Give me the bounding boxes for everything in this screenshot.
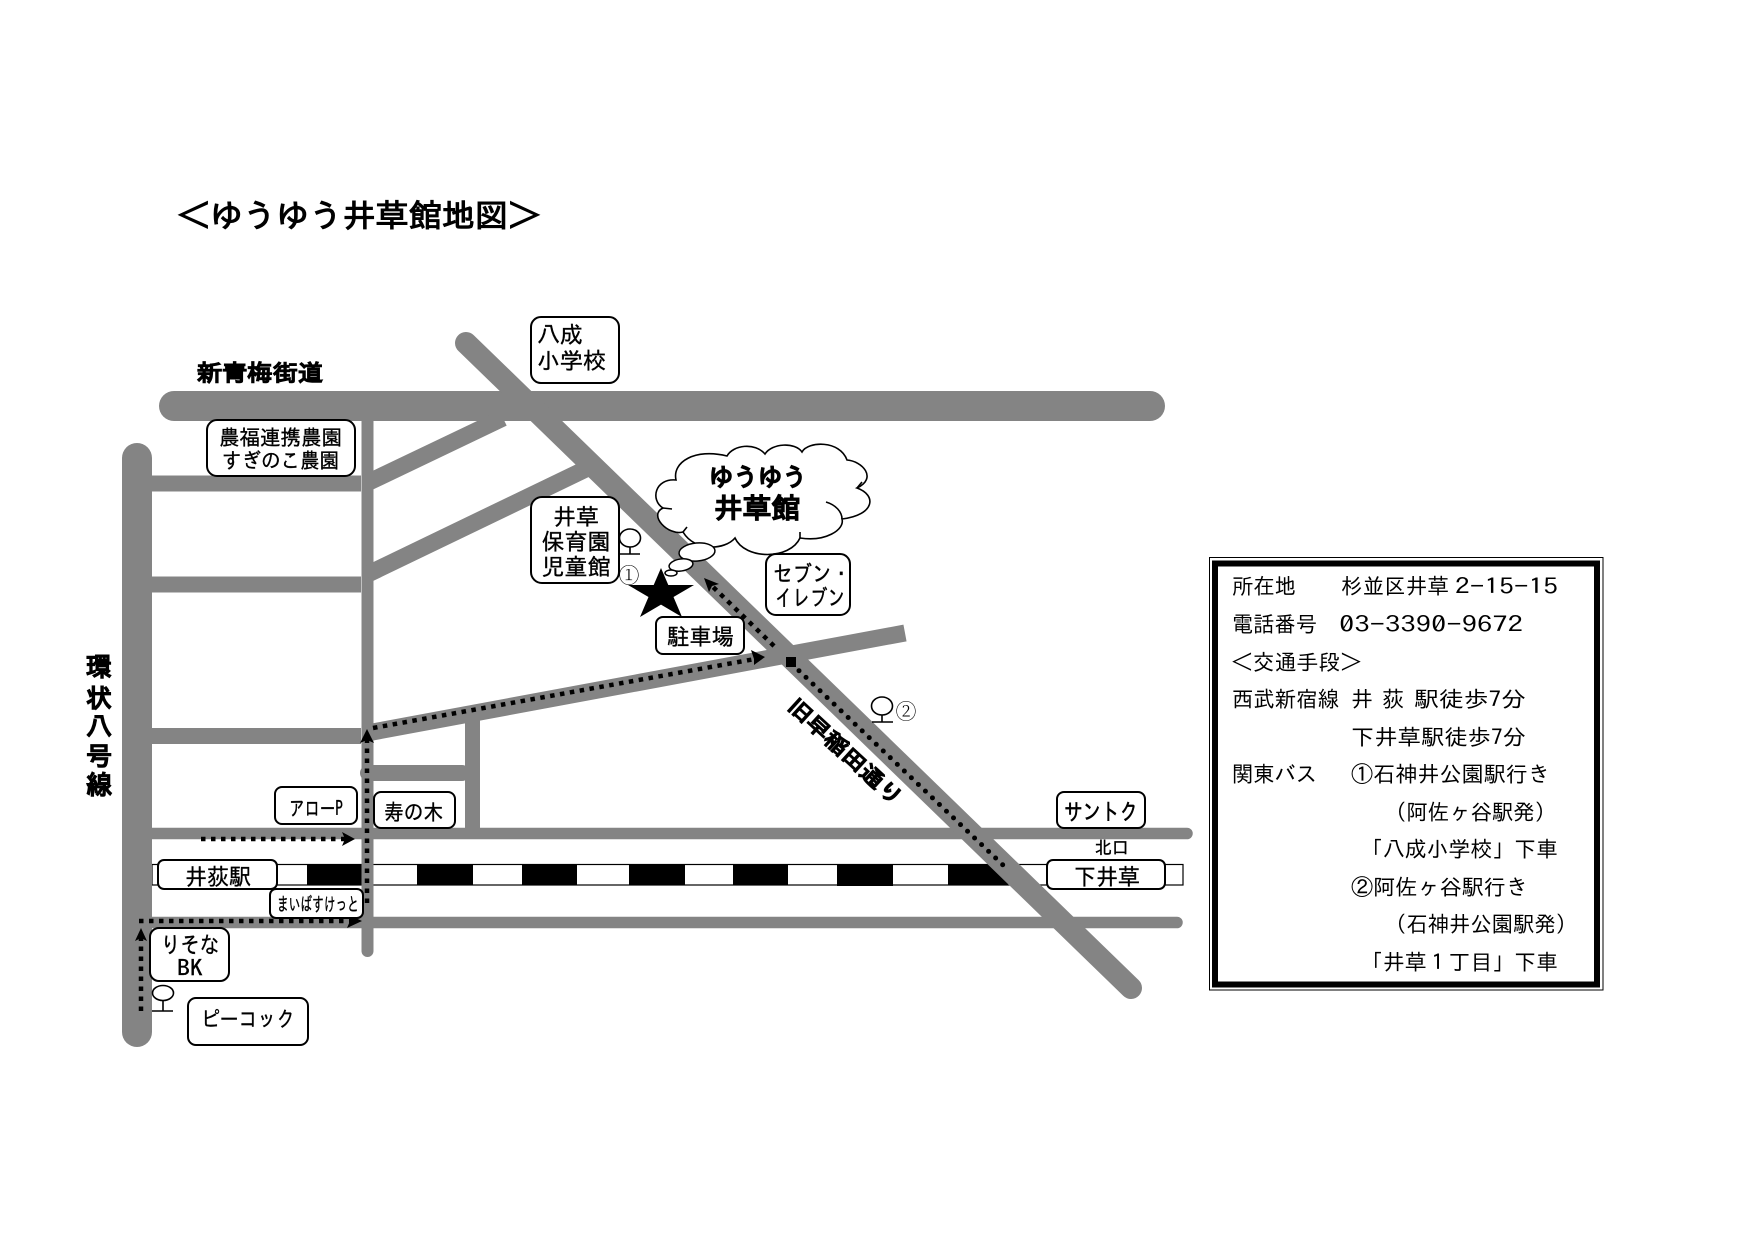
road label: 環状八号線: 八 (86, 714, 112, 740)
label: ピーコック (188, 998, 308, 1045)
road: street toward intersection (367, 633, 905, 733)
label: 寿の木 (374, 792, 455, 828)
road: street south of railway (150, 917, 1177, 928)
Kanto Bus access: （阿佐ヶ谷駅発） (1385, 801, 1556, 823)
icon: bus stop 3 (152, 986, 174, 1011)
address: 2-15-15 (1455, 575, 1558, 597)
label: 農福連携農園 すぎのこ農園: 農福連携農園 (219, 426, 342, 448)
Seibu Shinjuku line access: 駅徒歩7分 (1414, 688, 1526, 710)
label: まいばすけっと (270, 889, 363, 918)
label: アローP: アローP (289, 798, 343, 819)
callout: thought cloud ゆうゆう井草館 (656, 444, 870, 576)
road: west side street 1 (150, 476, 361, 492)
icon: bus stop 2 (872, 697, 893, 722)
icon: bus stop 1 (619, 529, 640, 554)
Seibu Shinjuku line access: 西武新宿線 (1232, 688, 1339, 710)
label: 井草保育園児童館: 井草 (553, 505, 599, 528)
Seibu Shinjuku line access: 荻 (1382, 688, 1404, 710)
label: りそなBK: BK (177, 956, 203, 979)
route: walking route along 旧早稲田通り to the star (704, 578, 1004, 866)
label: セブン・イレブン: セブン・ (773, 562, 851, 585)
Kanto Bus access: ①石神井公園駅行き (1351, 763, 1550, 785)
road: west side street 3 (150, 728, 361, 744)
label: りそなBK: りそな (161, 933, 219, 956)
label: りそなBK (150, 928, 229, 981)
label: 農福連携農園 すぎのこ農園: すぎのこ農園 (222, 450, 339, 471)
Kanto Bus access: ②阿佐ヶ谷駅行き (1351, 876, 1528, 898)
phone number (1232, 613, 1523, 635)
road network (137, 343, 1187, 1032)
road: short north-south street (465, 715, 480, 839)
railway track (152, 864, 1183, 886)
address: 杉並区井草 (1341, 575, 1449, 597)
title: ＜ゆうゆう井草館地図＞ (177, 199, 541, 231)
bus stop number 2: ② (896, 696, 916, 726)
address: 所在地 (1232, 575, 1296, 597)
label: 井草保育園児童館 (531, 497, 619, 583)
label: 八成小学校 (531, 317, 619, 383)
Kanto Bus access: 「八成小学校」下車 (1361, 838, 1558, 860)
road label: 環状八号線: 環 (86, 654, 112, 680)
label: セブン・イレブン: イレブン (775, 586, 845, 609)
label: 井荻駅 (158, 860, 277, 889)
Seibu Shinjuku line access: 井 (1351, 688, 1373, 710)
label: 農福連携農園 すぎのこ農園 (207, 420, 355, 476)
road: 新青梅街道 (174, 391, 1150, 421)
panel frame (1210, 558, 1603, 990)
callout: thought cloud ゆうゆう井草館: 井草館 (714, 494, 800, 522)
road label: 環状八号線: 状 (86, 685, 112, 711)
label: 下井草 (1047, 860, 1165, 889)
road: 環状八号線 (122, 458, 152, 1032)
callout: thought cloud ゆうゆう井草館: ゆうゆう (709, 465, 807, 490)
label: 八成小学校: 小学校 (537, 349, 606, 372)
road label: 新青梅街道: 新青梅街道 (197, 361, 323, 384)
transport heading: ＜交通手段＞ (1231, 651, 1362, 673)
label: 八成小学校: 八成 (537, 323, 583, 346)
label: 井草保育園児童館: 児童館 (542, 555, 610, 578)
Kanto Bus access: 関東バス (1232, 763, 1317, 785)
icon: star marking ゆうゆう井草館 (628, 568, 694, 617)
label: 井草保育園児童館: 保育園 (542, 530, 610, 553)
road: west side street 2 (150, 576, 361, 592)
road: diagonal branch north (367, 418, 503, 483)
Seibu Shinjuku line access: 下井草駅徒歩7分 (1351, 726, 1526, 748)
label: 井荻駅: 井荻駅 (185, 865, 251, 888)
label: 北口: 北口 (1095, 839, 1129, 857)
road: short east-west street (368, 765, 462, 781)
label: 下井草: 下井草 (1074, 865, 1140, 888)
route: walking route from 井荻駅 (135, 650, 765, 1011)
label: ピーコック: ピーコック (201, 1008, 295, 1030)
label: 駐車場: 駐車場 (667, 625, 734, 648)
bus stop number 1: ① (618, 560, 640, 590)
label: アローP (275, 787, 357, 824)
phone number: 電話番号 (1232, 613, 1317, 635)
Kanto Bus access: 「井草１丁目」下車 (1361, 951, 1558, 973)
label: セブン・イレブン (766, 554, 851, 615)
Kanto Bus access (1232, 763, 1577, 973)
label: 寿の木: 寿の木 (384, 801, 443, 823)
address (1232, 575, 1558, 597)
label: 駐車場 (656, 617, 744, 654)
road: central north-south street (362, 415, 374, 951)
Seibu Shinjuku line access (1232, 688, 1526, 748)
road: diagonal branch south (367, 467, 590, 574)
road label: 旧早稲田通り: 旧早稲田通り (785, 694, 907, 809)
label: サントク (1057, 792, 1145, 828)
label: サントク: サントク (1064, 800, 1138, 823)
label: まいばすけっと: まいばすけっと (277, 894, 359, 914)
road: street north of railway (150, 828, 1187, 839)
road: 旧早稲田通り (466, 343, 1131, 988)
road label: 環状八号線: 号 (86, 743, 112, 769)
road label: 環状八号線: 線 (86, 772, 112, 798)
panel: access information (1210, 558, 1603, 990)
phone number: 03-3390-9672 (1339, 613, 1523, 635)
Kanto Bus access: （石神井公園駅発） (1385, 913, 1577, 935)
